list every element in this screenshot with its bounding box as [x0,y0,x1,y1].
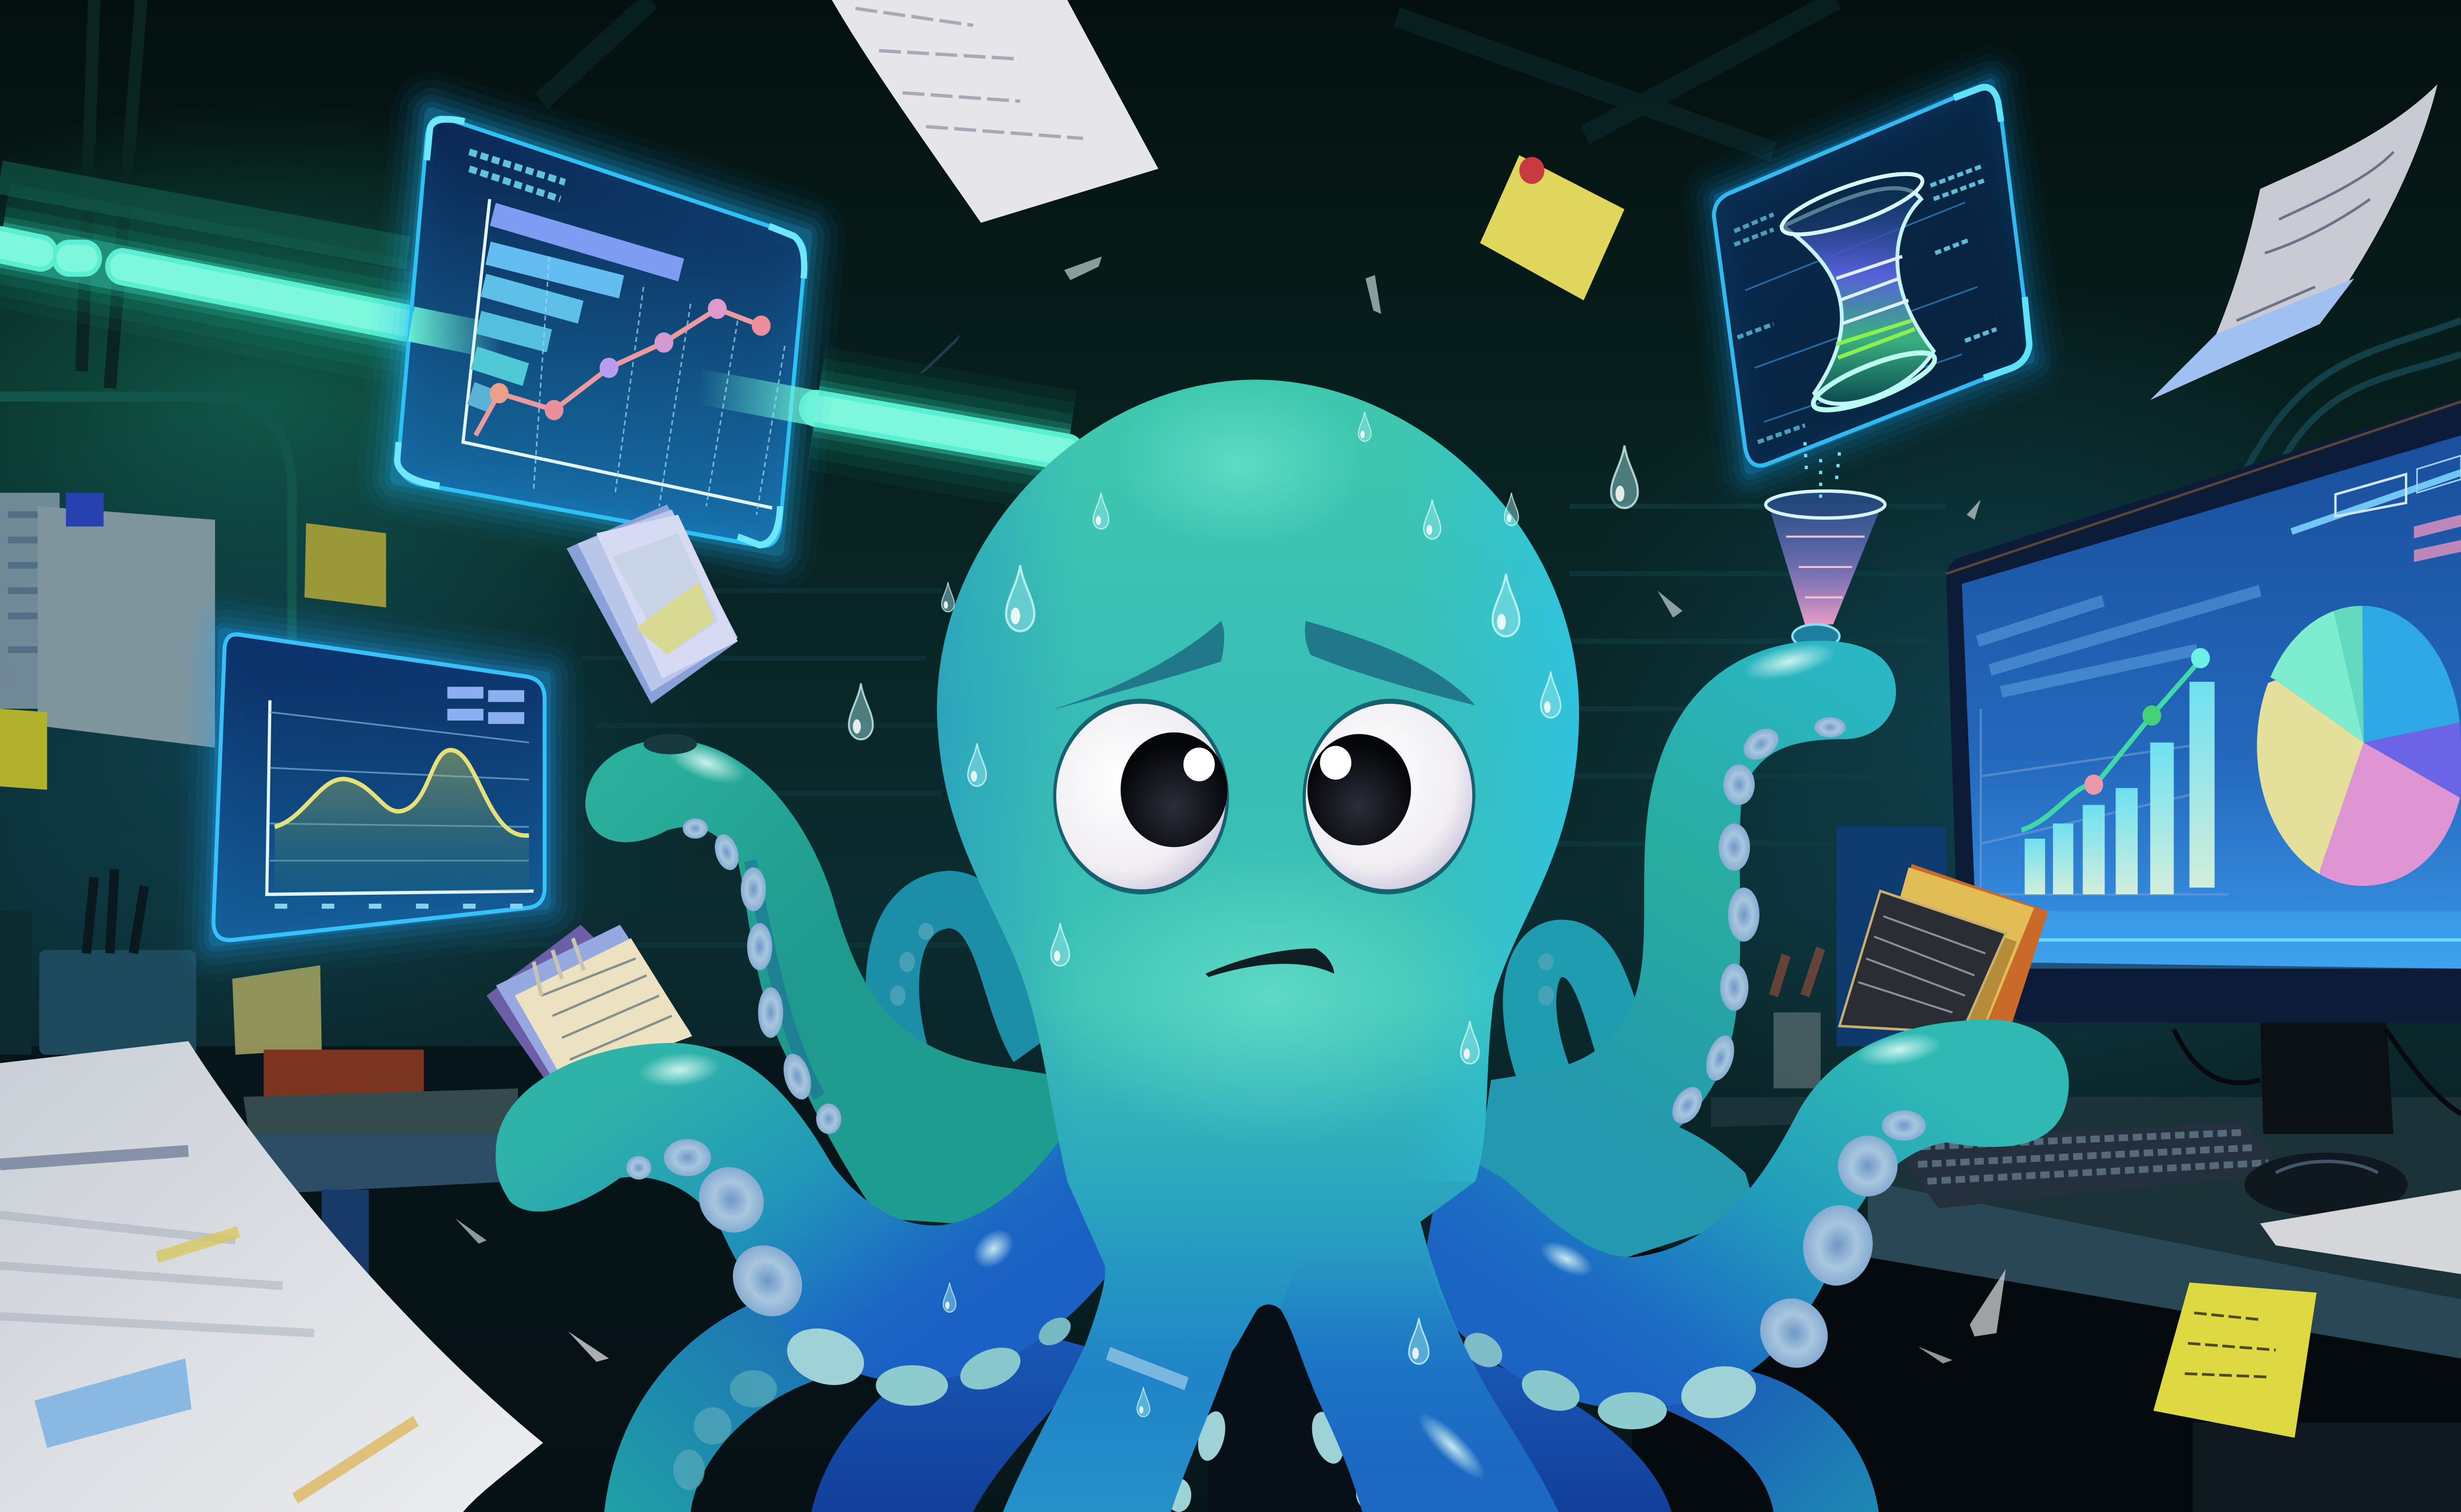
hologram panel: wave chart [214,634,545,940]
back tentacle upper left [892,899,1036,1080]
arm shine marks [1108,1354,1187,1384]
line series [475,299,771,436]
octopus head, body and centre tentacles [937,379,1579,1512]
upper right tentacle [1475,636,1896,1265]
monitor pie chart [2257,606,2461,886]
back tentacle lower right [1664,1367,1879,1512]
computer monitor with dashboard [1946,398,2461,1134]
hologram panel: hourglass funnel [1714,84,2029,469]
small funnel above tentacle [1766,442,1885,648]
falling paper top centre [832,0,1158,223]
right desk, keyboard and mouse [1711,948,2461,1512]
back tentacles [604,899,1879,1512]
foreground blurred paper bottom left [0,1041,543,1512]
inner centre suckers [1166,1407,1384,1512]
notepad [487,925,692,1097]
left desk with pen cup and red box [0,869,518,1274]
monitor bar chart [2021,648,2214,894]
left eye [1044,689,1238,904]
right eyebrow [1305,621,1475,705]
flying notebook [567,504,738,704]
sweat drops [849,412,1638,1417]
flying debris [455,256,2006,1363]
suckers [1458,1110,1926,1429]
left eyebrow [1055,621,1224,709]
upper left tentacle [585,733,1083,1232]
falling paper top right [2150,84,2437,400]
hologram panel: bars and line chart [397,115,816,548]
back tentacle lower left [604,1283,879,1512]
mid left tentacle holding notepad [487,925,1146,1406]
sticky note on desk [2153,1283,2317,1438]
suckers [683,819,841,1134]
folder stack [1839,864,2048,1033]
worried mouth [1205,948,1334,977]
sticky note flying with red pin [1480,155,1624,300]
back tentacle upper right [1530,948,1632,1080]
right eye [1291,687,1487,906]
dark lower blue tentacles [812,1299,1672,1512]
suckers [1666,717,1846,1130]
suckers [626,1139,1075,1406]
mid right tentacle holding folder [1420,864,2069,1429]
bars [471,214,681,402]
back suckers [673,923,1554,1490]
neon light tube [0,245,1067,452]
wall papers and sticky notes [0,493,386,1055]
